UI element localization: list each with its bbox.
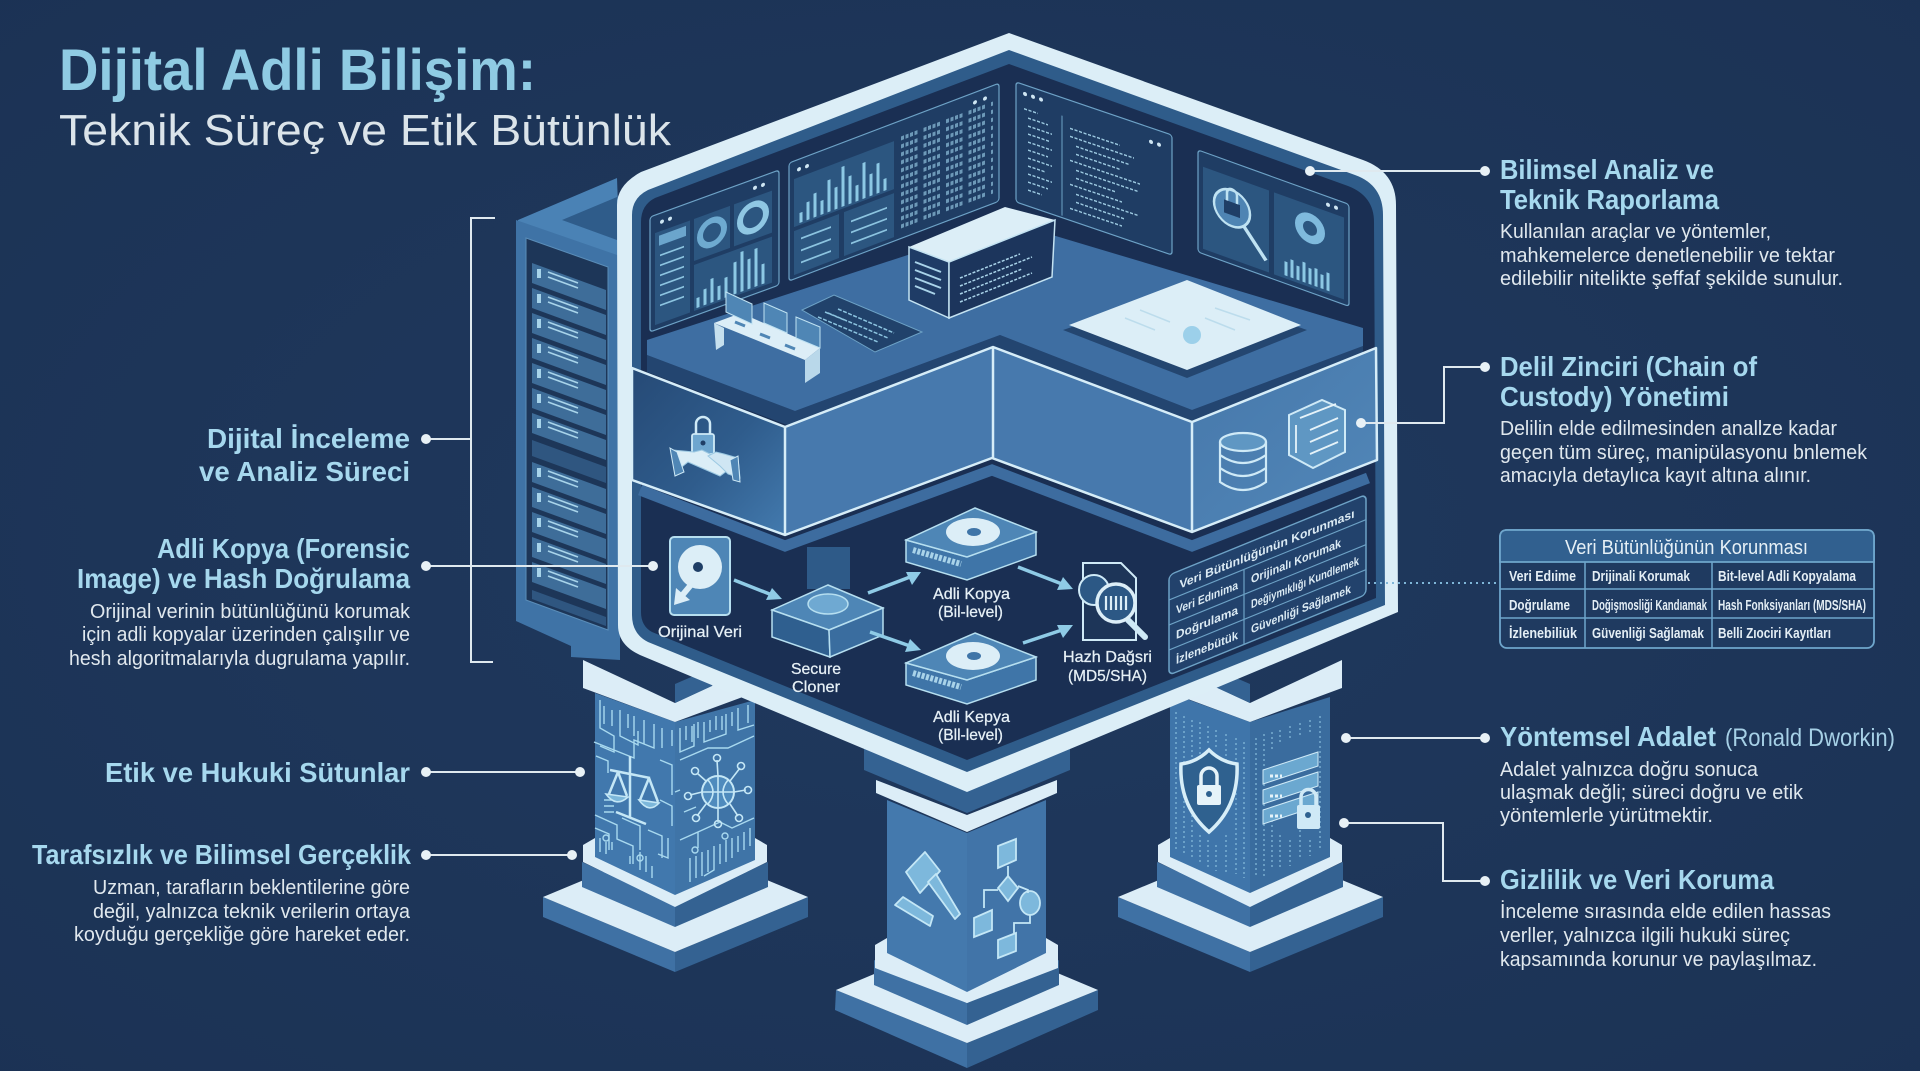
inset isometric integrity table: Orijinalı Korumak xyxy=(1251,536,1341,586)
text block: Bilimsel Analiz ve Teknik Raporlama: edilebilir nitelikte şeffaf şekilde sunulur. xyxy=(1500,267,1843,290)
pillar: left (scales and network) xyxy=(543,660,808,972)
server cube on floor xyxy=(909,207,1055,318)
table: Veri Bütünlüğünün Korunması: Belli Zıociri Kayıtları xyxy=(1718,626,1831,642)
inset isometric integrity table: Güvenliği Sağlamek xyxy=(1251,582,1351,636)
icon: original hard drive xyxy=(670,537,730,615)
text block: Gizlilik ve Veri Koruma: kapsamında korunur ve paylaşılmaz. xyxy=(1500,948,1817,971)
screen: code window xyxy=(1016,82,1172,255)
text block: Delil Zinciri Yönetimi: Custody) Yönetimi xyxy=(1500,381,1729,412)
label: hash value: (MD5/SHA) xyxy=(1068,668,1147,685)
central building frame xyxy=(617,33,1398,792)
label: secure cloner xyxy=(791,661,841,696)
text block: Bilimsel Analiz ve Teknik Raporlama xyxy=(1500,154,1843,290)
column under glass layer xyxy=(807,547,850,589)
icon: hash document and magnifier xyxy=(1079,563,1145,640)
icon: database and server xyxy=(1220,400,1345,490)
text block: Yöntemsel Adalet: Yöntemsel Adalet xyxy=(1500,721,1716,752)
text block: Gizlilik ve Veri Koruma: İnceleme sırasında elde edilen hassas xyxy=(1500,900,1831,923)
right connectors xyxy=(1305,166,1500,886)
document on floor xyxy=(802,295,922,352)
text block: Dijital İnceleme ve Analiz Süreci: Dijital İnceleme xyxy=(207,423,410,454)
chain of custody glass layer xyxy=(632,347,1377,535)
left connectors and bracket xyxy=(421,218,658,860)
text block: Bilimsel Analiz ve Teknik Raporlama: Bilimsel Analiz ve xyxy=(1500,154,1714,185)
pillar: center (gavel and flowchart) xyxy=(835,745,1098,1068)
text block: Delil Zinciri Yönetimi: Delil Zinciri (Chain of xyxy=(1500,351,1758,382)
text block: Gizlilik ve Veri Koruma: Gizlilik ve Veri Koruma xyxy=(1500,864,1774,895)
table: Veri Bütünlüğünün Korunması: Doğrulame xyxy=(1509,598,1570,614)
title: Dijital Adli Bilişim: xyxy=(59,38,536,103)
text block: Delil Zinciri Yönetimi: amacıyla detaylıca kayıt altına alınır. xyxy=(1500,464,1811,487)
forensic desk xyxy=(714,292,820,383)
lower chamber: forensic image flow xyxy=(640,470,1368,744)
table: Veri Bütünlüğünün Korunması: Güvenliği Sağlamak xyxy=(1592,626,1705,642)
text block: Adli Kopya ve Hash Doğrulama: hesh algoritmalarıyla dugrulama yapılır. xyxy=(69,647,410,670)
label: hash value xyxy=(1063,649,1152,685)
inset isometric integrity table: İzlenebütük xyxy=(1176,627,1238,667)
circuit traces on left pillar xyxy=(594,700,754,882)
text block: Gizlilik ve Veri Koruma xyxy=(1500,864,1831,971)
icon: secure cloner box xyxy=(772,585,883,657)
screen: dashboard with gauges xyxy=(650,170,779,332)
text block: Delil Zinciri Yönetimi: geçen tüm süreç, manipülasyonu bnlemek xyxy=(1500,441,1868,464)
text block: Adli Kopya ve Hash Doğrulama: için adli kopyalar üzerinden çalışılır ve xyxy=(82,623,410,646)
text block: Adli Kopya ve Hash Doğrulama xyxy=(69,533,411,670)
icon: network globe xyxy=(684,754,752,828)
label: hash value: Hazh Dağsri xyxy=(1063,649,1152,666)
label: forensic copy 1 xyxy=(933,586,1010,621)
text block: Dijital İnceleme ve Analiz Süreci: ve Analiz Süreci xyxy=(199,456,410,487)
icon: scales of justice xyxy=(606,756,659,824)
label: forensic copy 2: Adli Kepya xyxy=(933,709,1010,726)
text block: Yöntemsel Adalet: (Ronald Dworkin) xyxy=(1725,724,1895,752)
title: Teknik Süreç ve Etik Bütünlük xyxy=(59,106,672,155)
icon: shield with padlock xyxy=(1181,750,1237,832)
text block: Bilimsel Analiz ve Teknik Raporlama: Kullanılan araçlar ve yöntemler, xyxy=(1500,220,1771,243)
text block: Yöntemsel Adalet: ulaşmak değli; süreci doğru ve etik xyxy=(1500,781,1804,804)
data streams on right pillar xyxy=(1176,712,1320,878)
text block: Bilimsel Analiz ve Teknik Raporlama: mahkemelerce denetlenebilir ve tektar xyxy=(1500,244,1835,267)
table: Veri Bütünlüğünün Korunması: Drijinali Korumak xyxy=(1592,569,1691,585)
icon: forensic copy drive 1 xyxy=(906,508,1036,580)
text block: Adli Kopya ve Hash Doğrulama: Image) ve Hash Doğrulama xyxy=(77,563,410,594)
text block: Delil Zinciri Yönetimi: Delilin elde edilmesinden anallze kadar xyxy=(1500,417,1837,440)
icon: padlock and handshake xyxy=(670,417,740,482)
text block: Adli Kopya ve Hash Doğrulama: Adli Kopya (Forensic xyxy=(157,533,410,564)
table: Veri Bütünlüğünün Korunması: Bit-level Adli Kopyalama xyxy=(1718,569,1857,585)
table: Veri Bütünlüğünün Korunması: Doğişmosliği Kandıamak xyxy=(1592,598,1708,614)
text block: Yöntemsel Adalet xyxy=(1500,721,1895,827)
screen: charts and hex data xyxy=(789,83,999,281)
screen: padlock and magnifier analysis xyxy=(1198,150,1349,306)
text block: Dijital İnceleme ve Analiz Süreci xyxy=(199,423,410,487)
inset isometric integrity table xyxy=(1169,495,1366,675)
label: forensic copy 1: Adli Kopya xyxy=(933,586,1010,603)
label: forensic copy 1: (Bil-level) xyxy=(938,604,1003,621)
inset isometric integrity table: Doğrulama xyxy=(1176,603,1239,642)
table: Veri Bütünlüğünün Korunması: İzlenebiliük xyxy=(1509,625,1578,642)
text block: Delil Zinciri Yönetimi xyxy=(1500,351,1868,487)
server rack: left side of the building xyxy=(516,178,620,660)
inset isometric integrity table: Değiymıklığı Kundlemek xyxy=(1251,554,1359,611)
label: forensic copy 2 xyxy=(933,709,1010,744)
text block: Tarafsızlık ve Bilimsel Gerçeklik: Tarafsızlık ve Bilimsel Gerçeklik xyxy=(32,839,411,870)
table: Veri Bütünlüğünün Korunması: Veri Edıime xyxy=(1509,569,1576,585)
arrows: data flow xyxy=(734,567,1073,652)
text block: Tarafsızlık ve Bilimsel Gerçeklik: koyduğu gerçekliğe göre hareket eder. xyxy=(74,923,410,946)
text block: Tarafsızlık ve Bilimsel Gerçeklik: Uzman, tarafların beklentilerine göre xyxy=(93,876,410,899)
text block: Bilimsel Analiz ve Teknik Raporlama: Teknik Raporlama xyxy=(1500,184,1719,215)
text block: Tarafsızlık ve Bilimsel Gerçeklik: değil, yalnızca teknik verilerin ortaya xyxy=(93,900,411,923)
label: secure cloner: Secure xyxy=(791,661,841,678)
label: original data: Orijinal Veri xyxy=(658,624,742,641)
text block: Adli Kopya ve Hash Doğrulama: Orijinal verinin bütünlüğünü korumak xyxy=(90,600,411,623)
title xyxy=(59,38,672,155)
label: forensic copy 2: (Bll-level) xyxy=(938,727,1003,744)
table: Veri Bütünlüğünün Korunması xyxy=(1500,530,1874,648)
heading: Etik ve Hukuki Sütunlar: Etik ve Hukuki Sütunlar xyxy=(105,757,410,788)
icon: flowchart xyxy=(974,839,1040,958)
text block: Tarafsızlık ve Bilimsel Gerçeklik xyxy=(32,839,411,946)
inset isometric integrity table: Veri Edınima xyxy=(1176,578,1239,617)
white report tablet xyxy=(1063,280,1307,378)
text block: Yöntemsel Adalet: yöntemlerle yürütmektir. xyxy=(1500,804,1713,827)
label: secure cloner: Cloner xyxy=(792,679,841,696)
text block: Yöntemsel Adalet: Adalet yalnızca doğru sonuca xyxy=(1500,758,1759,781)
icon: login fields and padlock xyxy=(1263,752,1320,829)
inset isometric integrity table: Veri Bütünlüğünün Korunması xyxy=(1180,507,1355,592)
upper floor: analysis lab xyxy=(647,82,1363,428)
icon: gavel xyxy=(895,852,960,926)
text block: Gizlilik ve Veri Koruma: verller, yalnızca ilgili hukuki süreç xyxy=(1500,924,1790,947)
table: Veri Bütünlüğünün Korunması: Veri Bütünlüğünün Korunması xyxy=(1565,537,1808,559)
pillar: right (shield and lock) xyxy=(1118,660,1383,972)
icon: forensic copy drive 2 xyxy=(906,633,1036,704)
